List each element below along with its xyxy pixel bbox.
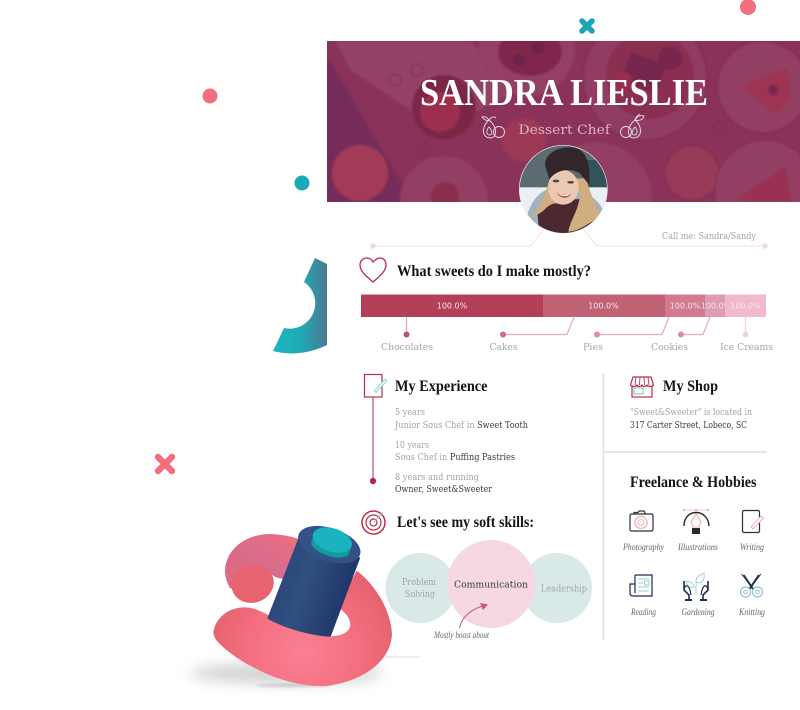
heading: shop: My Shop: [663, 378, 718, 395]
icon: target: [362, 511, 385, 534]
segment: cakes: [543, 294, 665, 317]
experience entry 3: Owner, Sweet&Sweeter: [395, 485, 493, 495]
decorative dot: pink top right: [740, 0, 756, 15]
hobby: writing: Writing: [740, 542, 764, 552]
section dividers: [604, 373, 767, 640]
tube: end cap: [227, 560, 279, 608]
hobby: reading: [630, 575, 656, 617]
icon: shop: [630, 377, 654, 397]
skill: leadership: [522, 553, 592, 623]
profile connector left: [370, 230, 543, 249]
cylinder top: [293, 519, 365, 571]
nickname note: Call me: Sandra/Sandy: [662, 232, 757, 242]
experience entry 3: [395, 473, 493, 495]
hobby: knitting: [738, 574, 765, 617]
skill: problem solving: Problem: [402, 578, 436, 588]
decorative cross: pink: [158, 457, 172, 471]
tube: upper arc: [225, 534, 301, 588]
skill: problem solving: [386, 553, 456, 623]
callout: cakes: [490, 317, 574, 353]
segment: ice creams: 100.0%: [730, 302, 761, 310]
experience entry 1: Junior Sous Chef in Sweet Tooth: [394, 421, 528, 431]
hobby: gardening: Gardening: [682, 607, 715, 617]
skill: communication: [447, 540, 535, 628]
subtitle: Dessert Chef: [518, 123, 611, 138]
experience entry 3: 8 years and running: [395, 473, 479, 483]
ground shadow: [190, 657, 421, 687]
decorative teal arc: [273, 258, 327, 353]
profile connector right: [584, 230, 768, 249]
callout: chocolates: Chocolates: [381, 343, 433, 353]
icon: experience notebook: [364, 374, 387, 397]
3D illustration: [190, 519, 421, 687]
shop address: 317 Carter Street, Lobeco, SC: [630, 421, 747, 431]
heading: experience: My Experience: [395, 378, 488, 395]
heading: hobbies: Freelance & Hobbies: [630, 474, 756, 491]
heading: sweets: What sweets do I make mostly?: [397, 263, 591, 280]
experience entry 1: 5 years: [395, 408, 425, 418]
hobby: writing: [740, 510, 764, 552]
name title: SANDRA LIESLIE: [420, 72, 708, 114]
teal cap: [309, 523, 355, 558]
hobby: reading: Reading: [630, 607, 656, 617]
experience entry 2: 10 years: [395, 441, 429, 451]
segment: pies: 100.0%: [670, 302, 701, 310]
icon: heart: [360, 258, 386, 282]
shop address: [630, 408, 752, 431]
hobby: photography: Photography: [622, 542, 664, 552]
decorative dot: teal: [294, 176, 310, 190]
skill: leadership: Leadership: [541, 584, 587, 594]
hobby: illustrations: Illustrations: [677, 542, 718, 552]
experience entry 1: [394, 408, 528, 431]
segment: cookies: 100.0%: [701, 302, 732, 310]
banner with dessert table background: [327, 41, 800, 202]
shop address: "Sweet&Sweeter" is located in: [630, 408, 752, 418]
segment: cakes: 100.0%: [588, 302, 619, 310]
callout: cookies: [651, 317, 710, 353]
skill: communication: Communication: [454, 580, 528, 590]
callout: cookies: Cookies: [651, 343, 688, 353]
decorative cross: teal: [582, 21, 592, 31]
callout: chocolates: [381, 317, 433, 353]
heading: soft skills: Let's see my soft skills:: [397, 514, 534, 531]
tube: main band: [213, 571, 392, 686]
segment: chocolates: 100.0%: [437, 302, 468, 310]
hobby: illustrations: [677, 509, 718, 552]
experience timeline: [370, 397, 376, 484]
stacked bar chart: [361, 294, 766, 317]
callout: pies: Pies: [583, 343, 603, 353]
hobby: knitting: Knitting: [738, 607, 765, 617]
segment: cookies: [701, 294, 732, 317]
hobby: photography: [622, 511, 664, 552]
icon: pear right: [620, 114, 644, 138]
segment: pies: [665, 294, 705, 317]
segment: ice creams: [725, 294, 766, 317]
callout: ice creams: [720, 317, 773, 353]
callout: ice creams: Ice Creams: [720, 343, 773, 353]
hobby: gardening: [682, 573, 715, 617]
profile photo: [517, 143, 610, 235]
callout: pies: [583, 317, 669, 353]
callout: cakes: Cakes: [490, 343, 518, 353]
cylinder body: [267, 533, 360, 637]
segment: chocolates: [361, 294, 543, 317]
skill: problem solving: Solving: [405, 590, 435, 600]
skill annotation: Mostly boast about: [433, 630, 489, 640]
experience entry 2: Sous Chef in Puffing Pastries: [395, 453, 515, 463]
decorative dot: pink left: [202, 88, 218, 104]
icon: pear left: [482, 117, 504, 138]
experience entry 2: [395, 441, 515, 463]
